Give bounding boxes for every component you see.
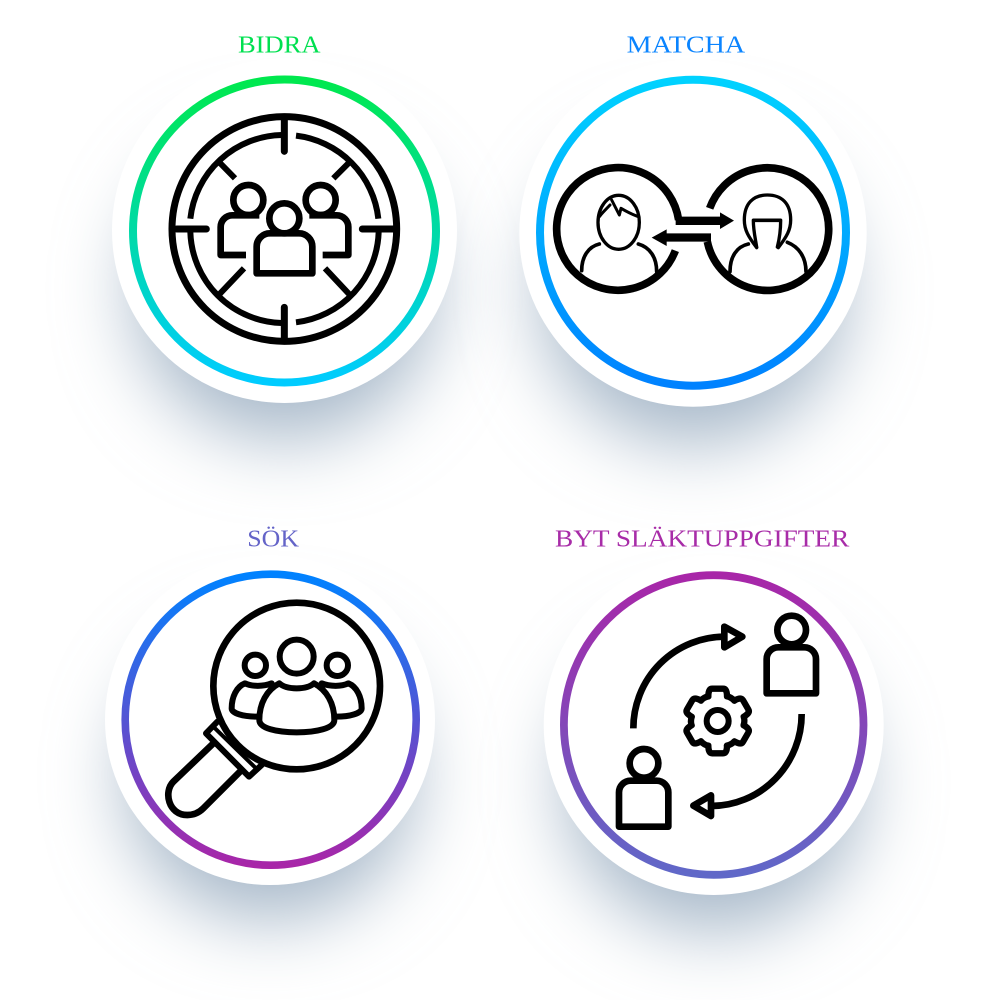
white disc [544, 555, 884, 895]
gradient ring [125, 574, 416, 865]
icon: two people swapping around a gear [619, 616, 816, 827]
white disc [112, 58, 457, 403]
title: bidra: BIDRA [238, 32, 321, 59]
icon: target with group of people [172, 117, 397, 341]
panel: sök [105, 526, 435, 919]
title: matcha: MATCHA [627, 32, 746, 59]
icon: two people exchanging arrows [557, 168, 829, 290]
icon: magnifying glass over people [168, 603, 380, 815]
panel: byt släktuppgifter [544, 526, 884, 930]
panel: bidra [112, 32, 457, 438]
disc shadow [566, 634, 862, 930]
disc shadow [126, 631, 414, 919]
white disc [519, 59, 867, 407]
panel: matcha [519, 32, 867, 443]
title: byt släktuppgifter: BYT SLÄKTUPPGIFTER [555, 526, 850, 553]
gradient ring [133, 80, 436, 382]
disc shadow [541, 139, 845, 443]
title: sök: SÖK [247, 526, 299, 553]
gradient ring [540, 80, 846, 386]
white disc [105, 555, 435, 885]
disc shadow [134, 138, 434, 438]
gradient ring [564, 575, 864, 875]
